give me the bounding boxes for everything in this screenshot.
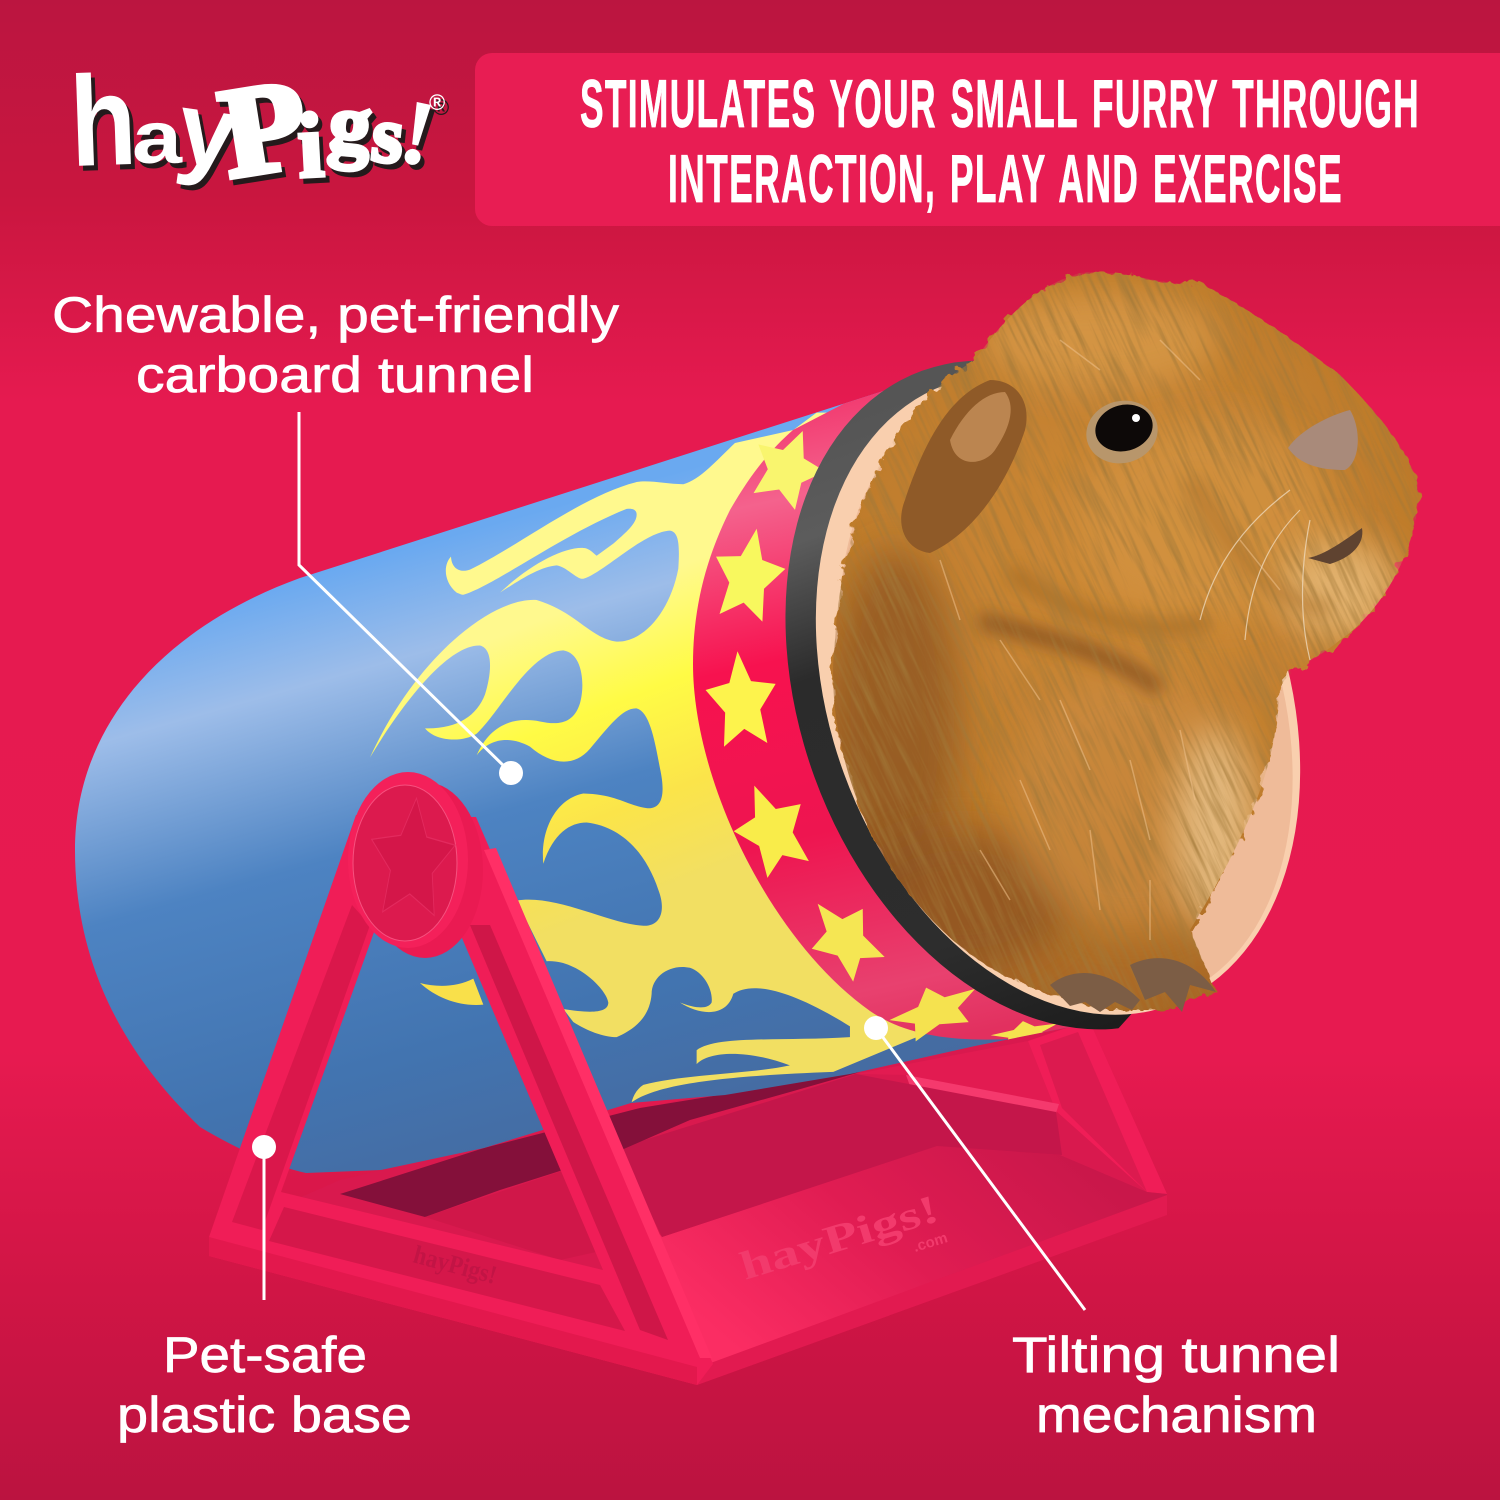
- right leg channel: [470, 925, 668, 1340]
- logo: s: [368, 90, 408, 181]
- label: base: [117, 1327, 412, 1443]
- label: tunnel: Chewable, pet-friendly: [52, 287, 619, 343]
- callout: tilting mechanism: [864, 1016, 1085, 1310]
- embossed floor logo: [734, 1186, 950, 1289]
- rear frame wall: [856, 1041, 1059, 1111]
- logo: i: [295, 94, 326, 197]
- tunnel rim: black ring: [785, 360, 1132, 1030]
- eye: [1079, 393, 1165, 471]
- banner: [475, 53, 1500, 226]
- crossbar panel: [269, 1207, 625, 1331]
- tunnel blue body: [75, 391, 1070, 1173]
- front paws: [1050, 958, 1216, 1012]
- nose: [1288, 410, 1358, 470]
- callout lines: [252, 412, 1085, 1310]
- base front edge: [209, 1237, 697, 1385]
- pig body: [833, 272, 1419, 1010]
- label: base: plastic base: [117, 1387, 412, 1443]
- shadow under tunnel: [340, 1072, 860, 1217]
- yellow flames: [370, 413, 917, 1102]
- frame body: [209, 815, 713, 1385]
- embossed floor logo: hayPigs!: [734, 1186, 944, 1289]
- callout: tunnel: [299, 412, 523, 785]
- cardboard tunnel: [75, 390, 1070, 1173]
- label: mechanism: mechanism: [1036, 1387, 1317, 1443]
- ear: [901, 380, 1027, 553]
- small embossed logo: hayPigs!: [410, 1240, 500, 1290]
- pivot star: [367, 795, 458, 917]
- pivot disc: [348, 772, 483, 958]
- banner headline: [580, 66, 1420, 217]
- embossed floor logo: .com: [911, 1229, 950, 1256]
- label: mechanism: [1012, 1327, 1340, 1443]
- guinea pig: [830, 271, 1422, 1012]
- label: mechanism: Tilting tunnel: [1012, 1327, 1340, 1383]
- logo: !: [392, 80, 443, 186]
- floor plate: [620, 1146, 1167, 1384]
- label: base: Pet-safe: [163, 1327, 367, 1383]
- logo: y: [171, 70, 245, 193]
- fur shading: [251, 272, 1418, 1306]
- logo: g: [325, 76, 375, 173]
- callout: plastic base: [252, 1135, 276, 1300]
- plastic base, rear and floor: [209, 1022, 1167, 1385]
- logo: a: [132, 96, 183, 179]
- mouth: [1308, 528, 1362, 564]
- logo: [68, 49, 445, 205]
- left leg channel: [232, 905, 370, 1230]
- star band: [693, 391, 1070, 1040]
- whiskers: [1200, 490, 1310, 660]
- logo: ®: [429, 90, 445, 115]
- logo: P: [211, 52, 316, 205]
- logo: h: [68, 49, 139, 194]
- label: tunnel: [52, 287, 619, 403]
- stars: [702, 418, 1060, 1049]
- label: tunnel: carboard tunnel: [136, 347, 534, 403]
- tunnel opening: [731, 307, 1385, 1083]
- plastic base, front A-frame: [209, 772, 713, 1385]
